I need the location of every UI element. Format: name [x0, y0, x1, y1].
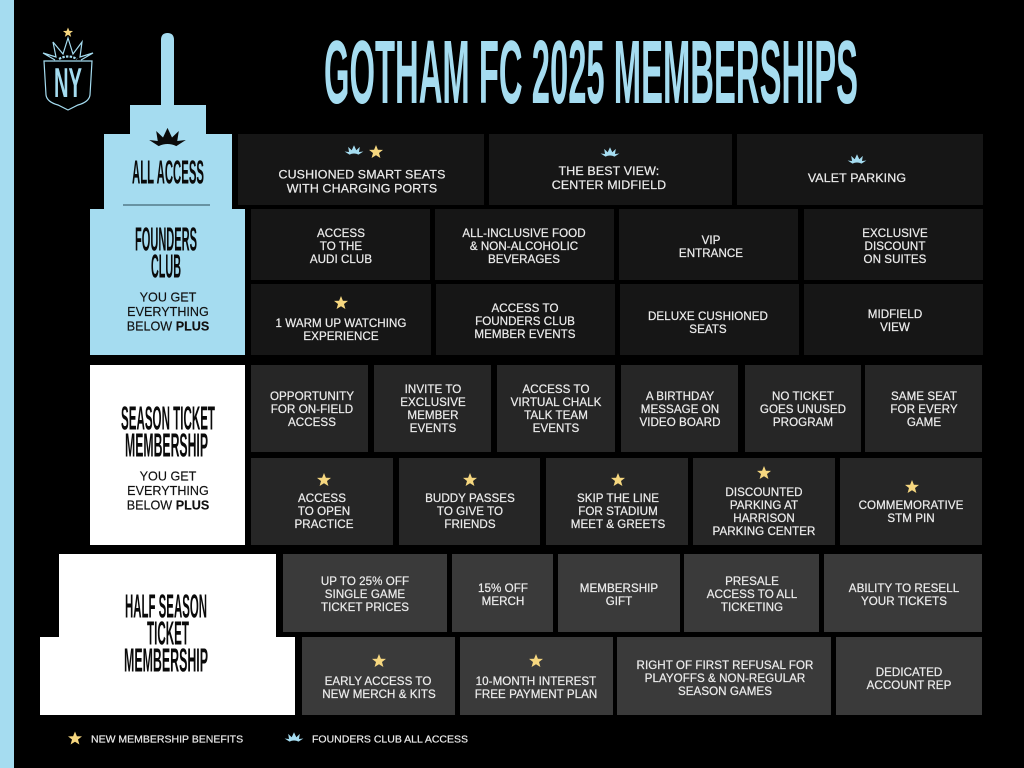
- benefit: founders events: MEMBER EVENTS: [474, 328, 576, 341]
- benefit: single game prices: TICKET PRICES: [321, 601, 409, 614]
- benefit: skip the line: MEET & GREETS: [571, 518, 665, 531]
- text: SEASON TICKET: [121, 400, 215, 436]
- benefit: best view: THE BEST VIEW:: [559, 164, 659, 178]
- benefit: on-field access: OPPORTUNITY: [270, 390, 354, 403]
- benefit: early access: [302, 637, 455, 715]
- benefit: chalk talk: TALK TEAM: [524, 409, 588, 422]
- benefit: early access: NEW MERCH & KITS: [322, 688, 436, 701]
- benefit: single game prices: UP TO 25% OFF: [321, 575, 409, 588]
- benefit: first refusal: SEASON GAMES: [678, 685, 772, 698]
- benefit: midfield view: [804, 284, 983, 355]
- benefit: deluxe seats: DELUXE CUSHIONED: [648, 310, 768, 323]
- benefit: no ticket unused: PROGRAM: [773, 416, 833, 429]
- benefit: open practice: TO OPEN: [298, 505, 350, 518]
- benefit: stm pin: [840, 458, 982, 545]
- benefit: single game prices: SINGLE GAME: [325, 588, 405, 601]
- benefit: exclusive discount: DISCOUNT: [865, 240, 925, 253]
- benefit: vip entrance: ENTRANCE: [679, 247, 743, 260]
- benefit: buddy passes: BUDDY PASSES: [425, 492, 515, 505]
- benefit: best view: CENTER MIDFIELD: [552, 178, 666, 192]
- tier: all access tower: [104, 33, 232, 209]
- benefit: presale: ACCESS TO ALL: [707, 588, 798, 601]
- logo: NY crown shield: [43, 27, 93, 110]
- benefit: account rep: DEDICATED: [876, 666, 942, 679]
- tier: half season ticket membership: [40, 554, 295, 715]
- benefit: single game prices: [283, 554, 447, 632]
- left sidebar stripe: [0, 0, 14, 768]
- benefit: warm up: EXPERIENCE: [303, 330, 379, 343]
- benefit: open practice: [251, 458, 393, 545]
- benefit: cushioned smart seats: CUSHIONED SMART SEATS: [278, 168, 446, 182]
- benefit: birthday message: [621, 365, 738, 452]
- benefit: cushioned smart seats: WITH CHARGING PORTS: [287, 182, 437, 196]
- tier: season ticket membership: BELOW PLUS: [127, 498, 209, 512]
- benefit: first refusal: PLAYOFFS & NON-REGULAR: [645, 672, 805, 685]
- tier: founders club: FOUNDERS: [135, 220, 197, 258]
- benefit: exclusive member events: MEMBER: [407, 409, 459, 422]
- benefit: discounted parking: PARKING CENTER: [713, 525, 815, 538]
- benefit: account rep: ACCOUNT REP: [867, 679, 952, 692]
- tier: season ticket membership: YOU GET: [140, 470, 197, 484]
- benefit: midfield view: MIDFIELD: [868, 308, 922, 321]
- benefit: same seat: [865, 365, 982, 452]
- benefit: discounted parking: [693, 458, 835, 545]
- tier: season ticket membership: MEMBERSHIP: [125, 426, 208, 464]
- benefit: on-field access: [251, 365, 368, 452]
- benefit: exclusive member events: EVENTS: [410, 422, 457, 435]
- benefit: discounted parking: PARKING AT: [730, 499, 798, 512]
- benefit: discounted parking: HARRISON: [733, 512, 795, 525]
- tier: season ticket membership: EVERYTHING: [127, 484, 209, 498]
- benefit: presale: [684, 554, 819, 632]
- tier: founders club: [90, 209, 245, 355]
- tier: founders club: CLUB: [151, 248, 181, 284]
- tier: half season ticket membership: MEMBERSHIP: [124, 642, 208, 678]
- benefit: presale: TICKETING: [721, 601, 783, 614]
- benefit: membership gift: [558, 554, 680, 632]
- benefit: membership gift: GIFT: [606, 595, 632, 608]
- benefit: payment plan: 10-MONTH INTEREST: [476, 675, 596, 688]
- icon: black crown: [149, 128, 186, 146]
- benefit: merch discount: [452, 554, 553, 632]
- tier: founders club: YOU GET: [140, 290, 197, 304]
- benefit: audi club: AUDI CLUB: [310, 253, 372, 266]
- benefit: payment plan: [460, 637, 613, 715]
- benefit: founders events: ACCESS TO: [491, 302, 559, 315]
- benefit: deluxe seats: [620, 284, 799, 355]
- benefit: all-inclusive food: & NON-ALCOHOLIC: [470, 240, 578, 253]
- benefit: first refusal: [617, 637, 831, 715]
- benefit: founders events: FOUNDERS CLUB: [475, 315, 575, 328]
- legend: NEW MEMBERSHIP BENEFITS: [91, 734, 243, 746]
- benefit: stm pin: STM PIN: [887, 512, 935, 525]
- legend: FOUNDERS CLUB ALL ACCESS: [312, 734, 468, 746]
- benefit: exclusive member events: INVITE TO: [405, 383, 461, 396]
- benefit: buddy passes: [399, 458, 540, 545]
- benefit: audi club: TO THE: [320, 240, 362, 253]
- benefit: all-inclusive food: ALL-INCLUSIVE FOOD: [462, 227, 586, 240]
- benefit: all-inclusive food: BEVERAGES: [488, 253, 560, 266]
- benefit: deluxe seats: SEATS: [689, 323, 727, 336]
- benefit: first refusal: RIGHT OF FIRST REFUSAL FOR: [637, 659, 813, 672]
- benefit: chalk talk: [497, 365, 615, 452]
- benefit: exclusive discount: [804, 209, 983, 280]
- tier: founders club: EVERYTHING: [127, 305, 209, 319]
- benefit: resell: ABILITY TO RESELL: [849, 582, 960, 595]
- benefit: vip entrance: [619, 209, 798, 280]
- benefit: vip entrance: VIP: [702, 234, 721, 247]
- benefit: chalk talk: EVENTS: [533, 422, 580, 435]
- benefit: warm up: [251, 284, 431, 355]
- benefit: open practice: ACCESS: [298, 492, 346, 505]
- benefit: exclusive member events: EXCLUSIVE: [400, 396, 466, 409]
- tier: half season ticket membership: TICKET: [147, 614, 189, 652]
- benefit: founders events: [436, 284, 615, 355]
- benefit: merch discount: MERCH: [482, 595, 524, 608]
- benefit: audi club: [251, 209, 430, 280]
- benefit: resell: [824, 554, 982, 632]
- benefit: early access: EARLY ACCESS TO: [325, 675, 431, 688]
- benefit: on-field access: FOR ON-FIELD: [271, 403, 353, 416]
- benefit: cushioned smart seats: [238, 134, 484, 205]
- benefit: valet parking: VALET PARKING: [808, 171, 906, 185]
- benefit: open practice: PRACTICE: [294, 518, 354, 531]
- benefit: midfield view: VIEW: [880, 321, 910, 334]
- benefit: exclusive discount: ON SUITES: [864, 253, 927, 266]
- legend: [68, 732, 468, 746]
- benefit: no ticket unused: [745, 365, 861, 452]
- benefit: resell: YOUR TICKETS: [861, 595, 947, 608]
- benefit: same seat: SAME SEAT: [891, 390, 957, 403]
- benefit: buddy passes: FRIENDS: [444, 518, 496, 531]
- benefit: merch discount: 15% OFF: [478, 582, 528, 595]
- benefit: best view: [489, 134, 732, 205]
- benefit: exclusive member events: [374, 365, 491, 452]
- tier: half season ticket membership: HALF SEASON: [125, 588, 207, 624]
- benefit: account rep: [836, 637, 982, 715]
- tier: founders club: BELOW PLUS: [127, 320, 209, 334]
- benefit: all-inclusive food: [435, 209, 614, 280]
- logo: NY crown shield: NY: [54, 59, 82, 106]
- benefit: no ticket unused: GOES UNUSED: [760, 403, 846, 416]
- benefit: exclusive discount: EXCLUSIVE: [862, 227, 928, 240]
- benefit: stm pin: COMMEMORATIVE: [859, 499, 964, 512]
- benefit: on-field access: ACCESS: [288, 416, 336, 429]
- benefit: birthday message: MESSAGE ON: [641, 403, 719, 416]
- benefit: payment plan: FREE PAYMENT PLAN: [475, 688, 597, 701]
- benefit: skip the line: [546, 458, 688, 545]
- text: ALL ACCESS: [132, 154, 204, 190]
- benefit: birthday message: A BIRTHDAY: [646, 390, 714, 403]
- benefit: discounted parking: DISCOUNTED: [725, 486, 803, 499]
- benefit: membership gift: MEMBERSHIP: [580, 582, 658, 595]
- benefit: buddy passes: TO GIVE TO: [437, 505, 503, 518]
- tier: season ticket membership: [90, 365, 245, 545]
- benefit: chalk talk: VIRTUAL CHALK: [511, 396, 602, 409]
- benefit: warm up: 1 WARM UP WATCHING: [275, 317, 407, 330]
- benefit: valet parking: [737, 134, 983, 205]
- benefit: skip the line: SKIP THE LINE: [577, 492, 659, 505]
- benefit: birthday message: VIDEO BOARD: [639, 416, 721, 429]
- benefit: same seat: GAME: [907, 416, 941, 429]
- benefit: chalk talk: ACCESS TO: [522, 383, 590, 396]
- benefit: no ticket unused: NO TICKET: [772, 390, 834, 403]
- benefit: audi club: ACCESS: [317, 227, 365, 240]
- benefit: presale: PRESALE: [725, 575, 779, 588]
- benefit: skip the line: FOR STADIUM: [578, 505, 658, 518]
- benefit: same seat: FOR EVERY: [890, 403, 958, 416]
